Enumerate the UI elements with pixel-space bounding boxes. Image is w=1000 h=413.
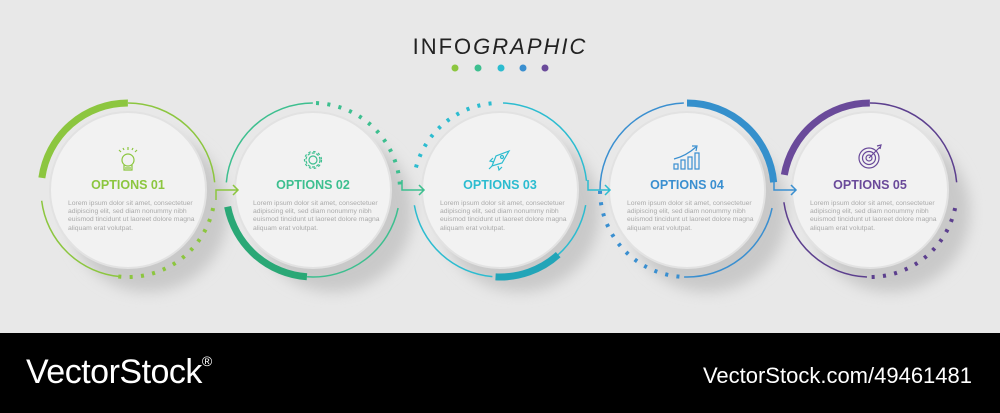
footer logo: VectorStock®: [26, 353, 212, 391]
card 2: Lorem ipsum dolor sit amet, consectetuer adipiscing elit, sed diam nonummy nibh euismod tincidunt ut laoreet dolore magna aliquam erat volutpat.: [253, 200, 380, 232]
card 1: [68, 178, 195, 232]
icon: bulb: [119, 147, 137, 170]
card 5: Lorem ipsum dolor sit amet, consectetuer adipiscing elit, sed diam nonummy nibh euismod tincidunt ut laoreet dolore magna aliquam erat volutpat.: [810, 200, 937, 232]
ring 3: [377, 67, 623, 313]
card 2: [253, 178, 380, 232]
card 1: Lorem ipsum dolor sit amet, consectetuer adipiscing elit, sed diam nonummy nibh euismod tincidunt ut laoreet dolore magna aliquam erat volutpat.: [68, 200, 195, 232]
icon: gear: [304, 152, 322, 168]
card 3: [440, 178, 567, 232]
icon: rocket: [489, 151, 509, 170]
card 4: OPTIONS 04: [650, 178, 724, 192]
arrows: [216, 180, 796, 200]
ring 2: [210, 87, 416, 293]
color dots: [452, 64, 548, 72]
card 2: OPTIONS 02: [276, 178, 350, 192]
icon: chart: [674, 146, 699, 169]
card 1: OPTIONS 01: [91, 178, 165, 192]
footer id: VectorStock.com/49461481: [703, 363, 972, 388]
shadows: [68, 132, 970, 292]
white discs: [50, 112, 948, 268]
card 5: OPTIONS 05: [833, 178, 907, 192]
ring 1: [25, 87, 231, 293]
card 3: OPTIONS 03: [463, 178, 537, 192]
ring 5: [767, 87, 973, 293]
card 4: [627, 178, 754, 232]
icon: target: [859, 145, 881, 168]
card 4: Lorem ipsum dolor sit amet, consectetuer adipiscing elit, sed diam nonummy nibh euismod tincidunt ut laoreet dolore magna aliquam erat volutpat.: [627, 200, 754, 232]
card 3: Lorem ipsum dolor sit amet, consectetuer adipiscing elit, sed diam nonummy nibh euismod tincidunt ut laoreet dolore magna aliquam erat volutpat.: [440, 200, 567, 232]
card 5: [810, 178, 937, 232]
title: INFOGRAPHIC: [413, 34, 587, 59]
footer: [0, 333, 1000, 413]
ring 4: [584, 87, 790, 293]
